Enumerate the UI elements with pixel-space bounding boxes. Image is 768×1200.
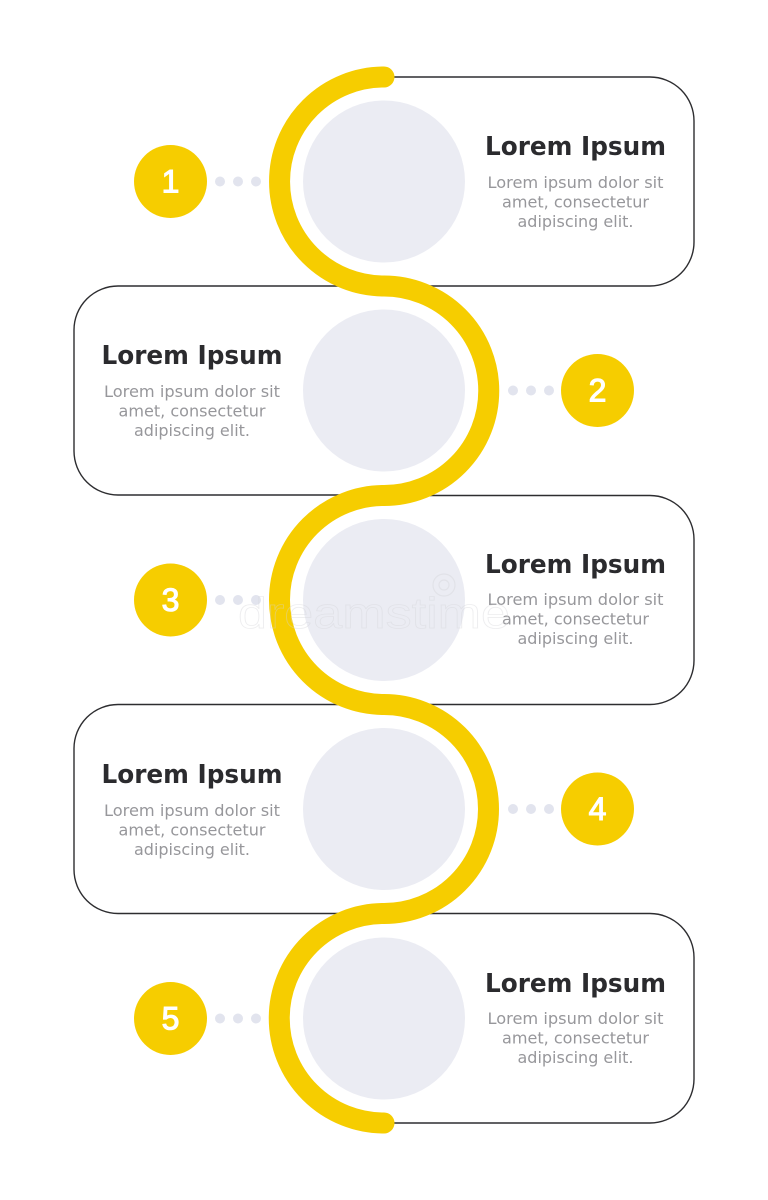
step 5 marker [134,982,261,1055]
step 3 text [485,550,666,648]
step 1 text: Lorem Ipsum [485,132,666,162]
step 3 marker [134,564,261,636]
step 4 text: Lorem Ipsum [102,760,282,790]
step 3 text: Lorem ipsum dolor sit [488,590,664,609]
step 3 marker: 3 [162,582,179,618]
step 4 marker: 4 [589,791,606,827]
step 2 marker: 2 [589,372,606,408]
step 2 text: amet, consectetur [118,402,266,420]
step 5 text: adipiscing elit. [518,1048,634,1067]
step 3 card [384,496,694,704]
step 2 marker [508,354,634,427]
step 2 text [102,341,282,440]
step 2 text: adipiscing elit. [134,421,250,440]
step 2 image placeholder [303,310,465,472]
step 1 text: amet, consectetur [502,192,649,212]
step 1 image placeholder [303,100,465,262]
step 4 text: amet, consectetur [118,820,266,840]
step 5 text: Lorem ipsum dolor sit [488,1009,664,1028]
step 5 image placeholder [303,938,465,1100]
watermark [238,574,510,638]
step 3 image placeholder [303,519,465,681]
step 5 text [485,969,666,1067]
step 1 text: adipiscing elit. [518,212,634,231]
step 5 marker: 5 [162,1000,179,1036]
step 4 text: adipiscing elit. [134,840,250,859]
step 3 text: Lorem Ipsum [485,550,666,580]
step 4 card [74,704,384,914]
step 1 marker [134,145,261,218]
step 2 card [74,286,384,495]
step 1 text [485,132,666,231]
step 2 text: Lorem Ipsum [102,341,282,371]
step 4 marker [508,772,634,846]
step 5 text: Lorem Ipsum [485,969,666,999]
yellow serpentine line [279,77,489,1123]
step 2 text: Lorem ipsum dolor sit [104,382,280,401]
step 3 text: adipiscing elit. [518,629,634,648]
step 1 text: Lorem ipsum dolor sit [488,173,664,192]
step 1 marker: 1 [162,164,179,200]
step 5 text: amet, consectetur [502,1028,649,1048]
step 1 card [384,77,694,286]
step 4 image placeholder [303,728,465,890]
watermark: dreamstime [238,589,510,638]
step 4 text [102,760,282,859]
step 5 card [384,914,694,1123]
step 3 text: amet, consectetur [502,610,649,628]
step 4 text: Lorem ipsum dolor sit [104,801,280,820]
